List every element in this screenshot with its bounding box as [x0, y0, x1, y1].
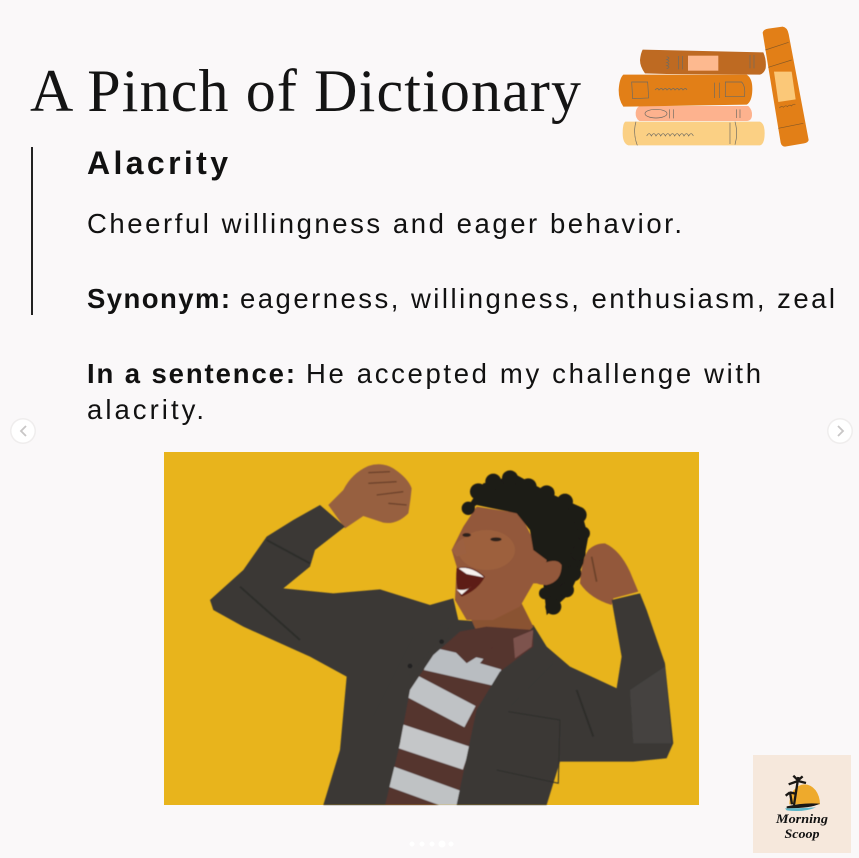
icon: stack of books [619, 27, 809, 147]
photo: excited man cheering on yellow background [164, 452, 699, 807]
raised right fist [580, 543, 638, 605]
ear [535, 561, 562, 585]
word heading: Alacrity [87, 145, 228, 181]
example sentence [87, 358, 761, 425]
raised left fist [328, 464, 412, 528]
logo wordmark: Scoop [784, 826, 820, 841]
accent vertical rule [31, 147, 33, 315]
polo shirt [385, 626, 534, 806]
example sentence: In a sentence: [87, 358, 295, 389]
logo wordmark [775, 811, 829, 841]
jacket front edges [360, 618, 457, 805]
hair [462, 470, 590, 615]
example sentence: He accepted my challenge with [306, 358, 761, 389]
jacket [210, 505, 673, 805]
synonym line: eagerness, willingness, enthusiasm, zeal [240, 283, 835, 314]
logo wordmark: Morning [775, 811, 829, 826]
icon: next arrow button [827, 418, 853, 444]
carousel dots [410, 840, 454, 848]
neck [470, 603, 533, 650]
example sentence: alacrity. [87, 394, 204, 425]
definition text: Cheerful willingness and eager behavior. [87, 208, 682, 239]
logo icon: sun and palm trees [785, 776, 820, 811]
synonym line: Synonym: [87, 283, 230, 314]
title: A Pinch of Dictionary [30, 58, 581, 124]
logo: Morning Scoop [753, 755, 851, 853]
icon: previous arrow button [10, 418, 36, 444]
face [452, 507, 562, 620]
mouth [456, 567, 485, 597]
